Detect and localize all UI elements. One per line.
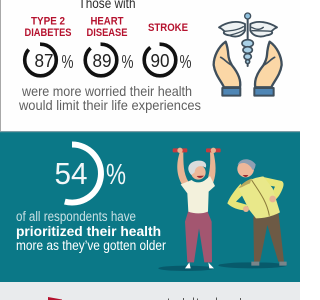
text: worried statement: would limit their life experiences	[18, 97, 201, 113]
text: clipped heading tops	[168, 298, 241, 300]
label: type 2 diabetes: TYPE 2	[31, 16, 65, 28]
illustration: man stretching	[218, 159, 287, 268]
text: worried statement	[18, 83, 201, 113]
icon: snake	[242, 40, 253, 64]
stat: 87 percent	[25, 44, 74, 76]
icon: staff	[245, 17, 251, 66]
stat: 54: 54	[54, 156, 88, 191]
stat: 89 percent: %	[122, 52, 134, 72]
stat: 89 percent	[85, 44, 134, 76]
icon: wings	[219, 22, 277, 37]
panel: next section	[0, 282, 300, 300]
stat: 89 percent: 89	[92, 51, 112, 71]
stat: 87 percent: %	[62, 52, 74, 72]
stat: 90 percent: 90	[150, 51, 170, 71]
icon: left hand	[214, 42, 240, 87]
text: respondents statement: prioritized their health	[16, 224, 161, 239]
icon: right cuff	[254, 88, 274, 96]
label: type 2 diabetes: DIABETES	[24, 27, 72, 39]
illustration: exercising seniors	[158, 148, 287, 271]
label: heart disease: HEART	[90, 16, 124, 28]
label: stroke: STROKE	[148, 22, 188, 34]
text: respondents statement: more as they’ve gotten older	[16, 238, 166, 253]
icon: right hand	[255, 42, 282, 87]
stat: percent sign: %	[106, 159, 126, 191]
stat: 87 percent: 87	[34, 51, 54, 71]
stat: 90 percent	[144, 44, 192, 76]
text: worried statement: were more worried their health	[21, 83, 192, 99]
illustration: woman with dumbbells	[158, 148, 221, 271]
stat: 90 percent: %	[180, 52, 192, 72]
icon: staff ball	[245, 13, 251, 19]
chart: 54 percent arc	[65, 144, 101, 202]
text: respondents statement: of all respondents have	[16, 209, 136, 224]
icon: left cuff	[222, 88, 240, 96]
icon: caduceus in caring hands	[214, 13, 282, 96]
text: respondents statement	[16, 209, 166, 253]
panel: conditions	[18, 0, 201, 113]
icon: red shape	[48, 297, 62, 300]
label: heart disease: DISEASE	[86, 27, 128, 39]
panel: prioritized health	[0, 131, 300, 282]
label: type 2 diabetes	[24, 16, 72, 39]
label: heart disease	[86, 16, 128, 39]
